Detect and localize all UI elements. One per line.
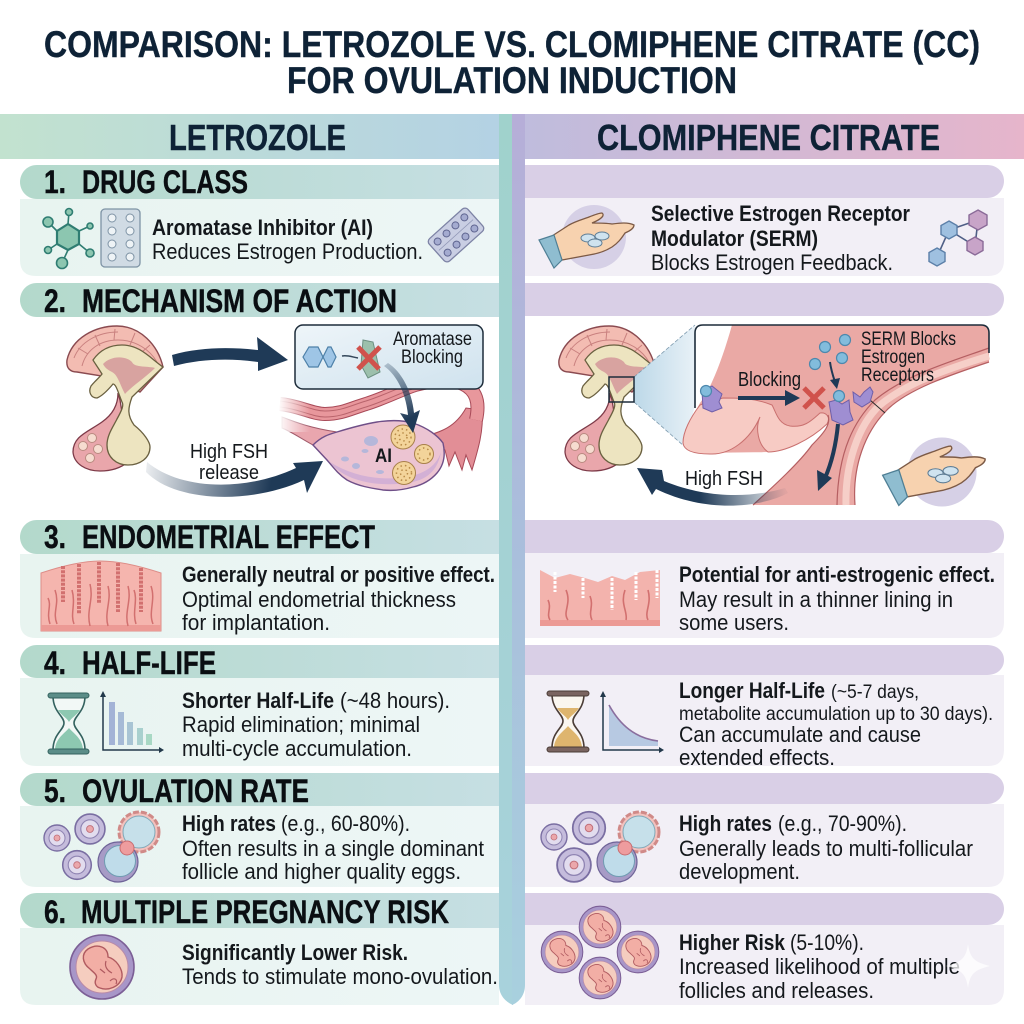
text: significantly lower risk (182, 940, 498, 989)
text: higher risk: Higher Risk (679, 930, 786, 955)
text: high rates 70-90%: (e.g., 70-90%). (778, 811, 907, 836)
text: high rates 60-80%: follicle and higher quality eggs. (182, 859, 461, 884)
arrow: blocking (738, 390, 800, 406)
illustration: thin endometrium (540, 570, 660, 626)
panel: letrozole endometrial effect (20, 519, 499, 638)
text: longer half-life (679, 678, 993, 770)
text: SERM (651, 201, 910, 275)
text: high rates 60-80%: Often results in a single dominant (182, 836, 484, 861)
icon: follicles (44, 812, 159, 882)
title: FOR OVULATION INDUCTION (287, 60, 737, 101)
text: longer half-life: (~5-7 days, (831, 682, 919, 703)
panel: letrozole half-life (20, 645, 499, 766)
heading: 4. half-life: 4. (44, 645, 66, 681)
text: high rates 60-80% (182, 811, 484, 884)
heading: 5. ovulation rate: OVULATION RATE (82, 773, 309, 809)
label: high FSH release: High FSH (190, 441, 268, 463)
text: high rates 70-90%: Generally leads to multi-follicular (679, 836, 973, 861)
icon: multiple follicles (541, 812, 659, 882)
heading: 4. half-life (44, 645, 216, 681)
icon: hand with pills (883, 437, 985, 507)
callout: aromatase blocking (295, 325, 483, 389)
illustration: brain and pituitary with inset box (559, 325, 695, 471)
text: neutral or positive effect: Optimal endometrial thickness (182, 587, 456, 612)
text: shorter half-life: Rapid elimination; minimal (182, 712, 420, 737)
heading: 6. multiple pregnancy risk: 6. (44, 894, 66, 930)
chart: slow decay curve (600, 691, 664, 753)
panel: letrozole drug class (20, 164, 499, 276)
text: aromatase inhibitor: Aromatase Inhibitor (AI) (152, 215, 373, 240)
heading: 1. drug class: DRUG CLASS (82, 164, 248, 200)
label: SERM blocks estrogen receptors: Estrogen (861, 347, 925, 368)
text: SERM: Selective Estrogen Receptor (651, 201, 910, 226)
icon: single fetus (70, 935, 134, 999)
text: longer half-life: metabolite accumulation up to 30 days). (679, 704, 993, 725)
text: longer half-life: Can accumulate and cause (679, 722, 921, 747)
text: higher risk (679, 930, 960, 1003)
column header: clomiphene citrate: CLOMIPHENE CITRATE (597, 117, 940, 158)
label: SERM blocks estrogen receptors: Receptors (861, 365, 934, 386)
heading: 1. drug class: 1. (44, 164, 66, 200)
icon: sparkle watermark (946, 944, 990, 988)
heading: 2. mechanism of action: MECHANISM OF ACTION (82, 283, 397, 319)
text: significantly lower risk: Tends to stimulate mono-ovulation. (182, 964, 498, 989)
text: high rates 60-80%: (e.g., 60-80%). (281, 811, 410, 836)
heading: 5. ovulation rate: 5. (44, 773, 66, 809)
text: SERM: Blocks Estrogen Feedback. (651, 250, 893, 275)
text: neutral or positive effect: for implantation. (182, 610, 330, 635)
icon: molecule (43, 208, 94, 268)
text: higher risk: (5-10%). (790, 930, 864, 955)
text: neutral or positive effect (182, 562, 495, 635)
heading: 3. endometrial effect: ENDOMETRIAL EFFECT (82, 519, 375, 555)
label: blocking: Blocking (738, 369, 801, 391)
text: high rates 70-90%: development. (679, 859, 800, 884)
panel: clomiphene multiple pregnancy risk (525, 893, 1004, 1005)
label: AI: AI (375, 446, 392, 467)
heading: 1. drug class (44, 164, 248, 200)
panel: clomiphene mechanism of action (525, 283, 1004, 507)
heading: 4. half-life: HALF-LIFE (82, 645, 216, 681)
text: high rates 70-90%: High rates (679, 811, 772, 836)
label: high FSH release: release (199, 462, 259, 484)
heading: 6. multiple pregnancy risk: MULTIPLE PREGNANCY RISK (81, 894, 449, 930)
panel: letrozole ovulation rate (20, 773, 499, 887)
arrow: high FSH release (146, 461, 323, 497)
panel: letrozole mechanism of action (20, 283, 499, 497)
heading: 3. endometrial effect: 3. (44, 519, 66, 555)
panel: clomiphene drug class (525, 165, 1004, 276)
icon: four fetuses (541, 906, 659, 999)
label: SERM blocks estrogen receptors: SERM Blocks (861, 329, 956, 350)
text: aromatase inhibitor: Reduces Estrogen Production. (152, 239, 423, 264)
callout: aromatase blocking: Aromatase (393, 329, 472, 350)
text: shorter half-life: (~48 hours). (340, 688, 450, 713)
text: anti-estrogenic effect: some users. (679, 610, 789, 635)
text: shorter half-life: multi-cycle accumulation. (182, 736, 412, 761)
callout: aromatase blocking: Blocking (401, 347, 463, 368)
arrow: brain to aromatase (172, 337, 288, 371)
text: longer half-life: Longer Half-Life (679, 678, 825, 703)
text: significantly lower risk: Significantly Lower Risk. (182, 940, 408, 965)
chart: rapid decline bars (100, 691, 164, 753)
icon: hourglass (48, 693, 89, 754)
illustration: brain and pituitary (67, 326, 163, 471)
icon: hand with pills (539, 205, 634, 269)
text: anti-estrogenic effect (679, 562, 995, 635)
icon: SERM molecule (929, 210, 987, 266)
text: higher risk: Increased likelihood of multiple (679, 954, 960, 979)
arrow: high FSH (637, 468, 788, 506)
text: longer half-life: extended effects. (679, 745, 835, 770)
heading: 2. mechanism of action: 2. (44, 283, 66, 319)
text: neutral or positive effect: Generally neutral or positive effect. (182, 562, 495, 587)
icon: red block cross (804, 388, 824, 408)
panel: letrozole multiple pregnancy risk (20, 893, 499, 1005)
text: high rates 60-80%: High rates (182, 811, 276, 836)
text: shorter half-life: Shorter Half-Life (182, 688, 334, 713)
text: high rates 70-90% (679, 811, 973, 884)
panel: clomiphene half-life (525, 645, 1004, 770)
illustration: thick endometrium (41, 561, 161, 631)
panel: clomiphene endometrial effect (525, 520, 1004, 638)
text: SERM: Modulator (SERM) (651, 226, 818, 251)
text: higher risk: follicles and releases. (679, 978, 874, 1003)
central divider bar (499, 114, 525, 1005)
text: shorter half-life (182, 688, 450, 761)
icon: hourglass (547, 691, 589, 752)
illustration: magnified pituitary receptors (683, 325, 989, 505)
column header: letrozole: LETROZOLE (169, 117, 346, 158)
illustration: fallopian tube and ovary (278, 378, 482, 490)
arrow: aromatase to ovary (384, 363, 420, 433)
panel: clomiphene ovulation rate (525, 773, 1004, 887)
icon: blister pack (101, 209, 140, 267)
column header: letrozole (0, 114, 500, 159)
text: anti-estrogenic effect: May result in a thinner lining in (679, 587, 953, 612)
label: SERM blocks estrogen receptors (861, 329, 956, 386)
label: high FSH release (190, 441, 268, 484)
text: aromatase inhibitor (152, 215, 423, 264)
label: high FSH: High FSH (685, 468, 763, 490)
title (44, 24, 980, 101)
icon: tilted tablet strip (427, 206, 485, 264)
